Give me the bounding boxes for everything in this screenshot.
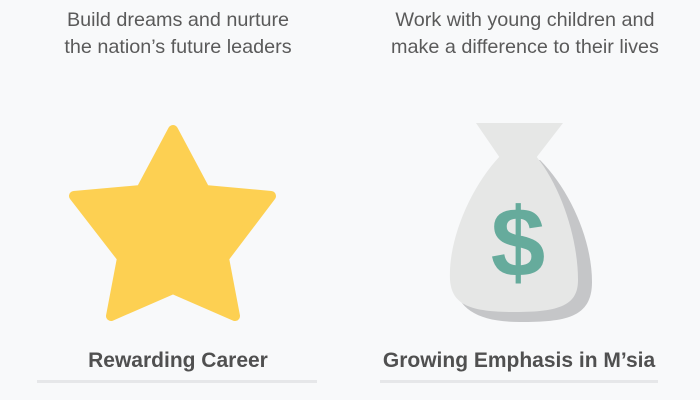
text: left caption: the nation’s future leaders xyxy=(64,36,292,58)
icon: money bag: $ xyxy=(491,187,545,297)
text: left caption: Build dreams and nurture xyxy=(67,9,289,31)
heading: Rewarding Career: Rewarding Career xyxy=(88,349,268,372)
heading: Growing Emphasis: Growing Emphasis in M’sia xyxy=(383,349,655,372)
text: right caption: make a difference to their lives xyxy=(391,36,659,58)
text: right caption xyxy=(391,9,659,58)
text: left caption xyxy=(64,9,292,58)
text: right caption: Work with young children and xyxy=(395,9,655,31)
